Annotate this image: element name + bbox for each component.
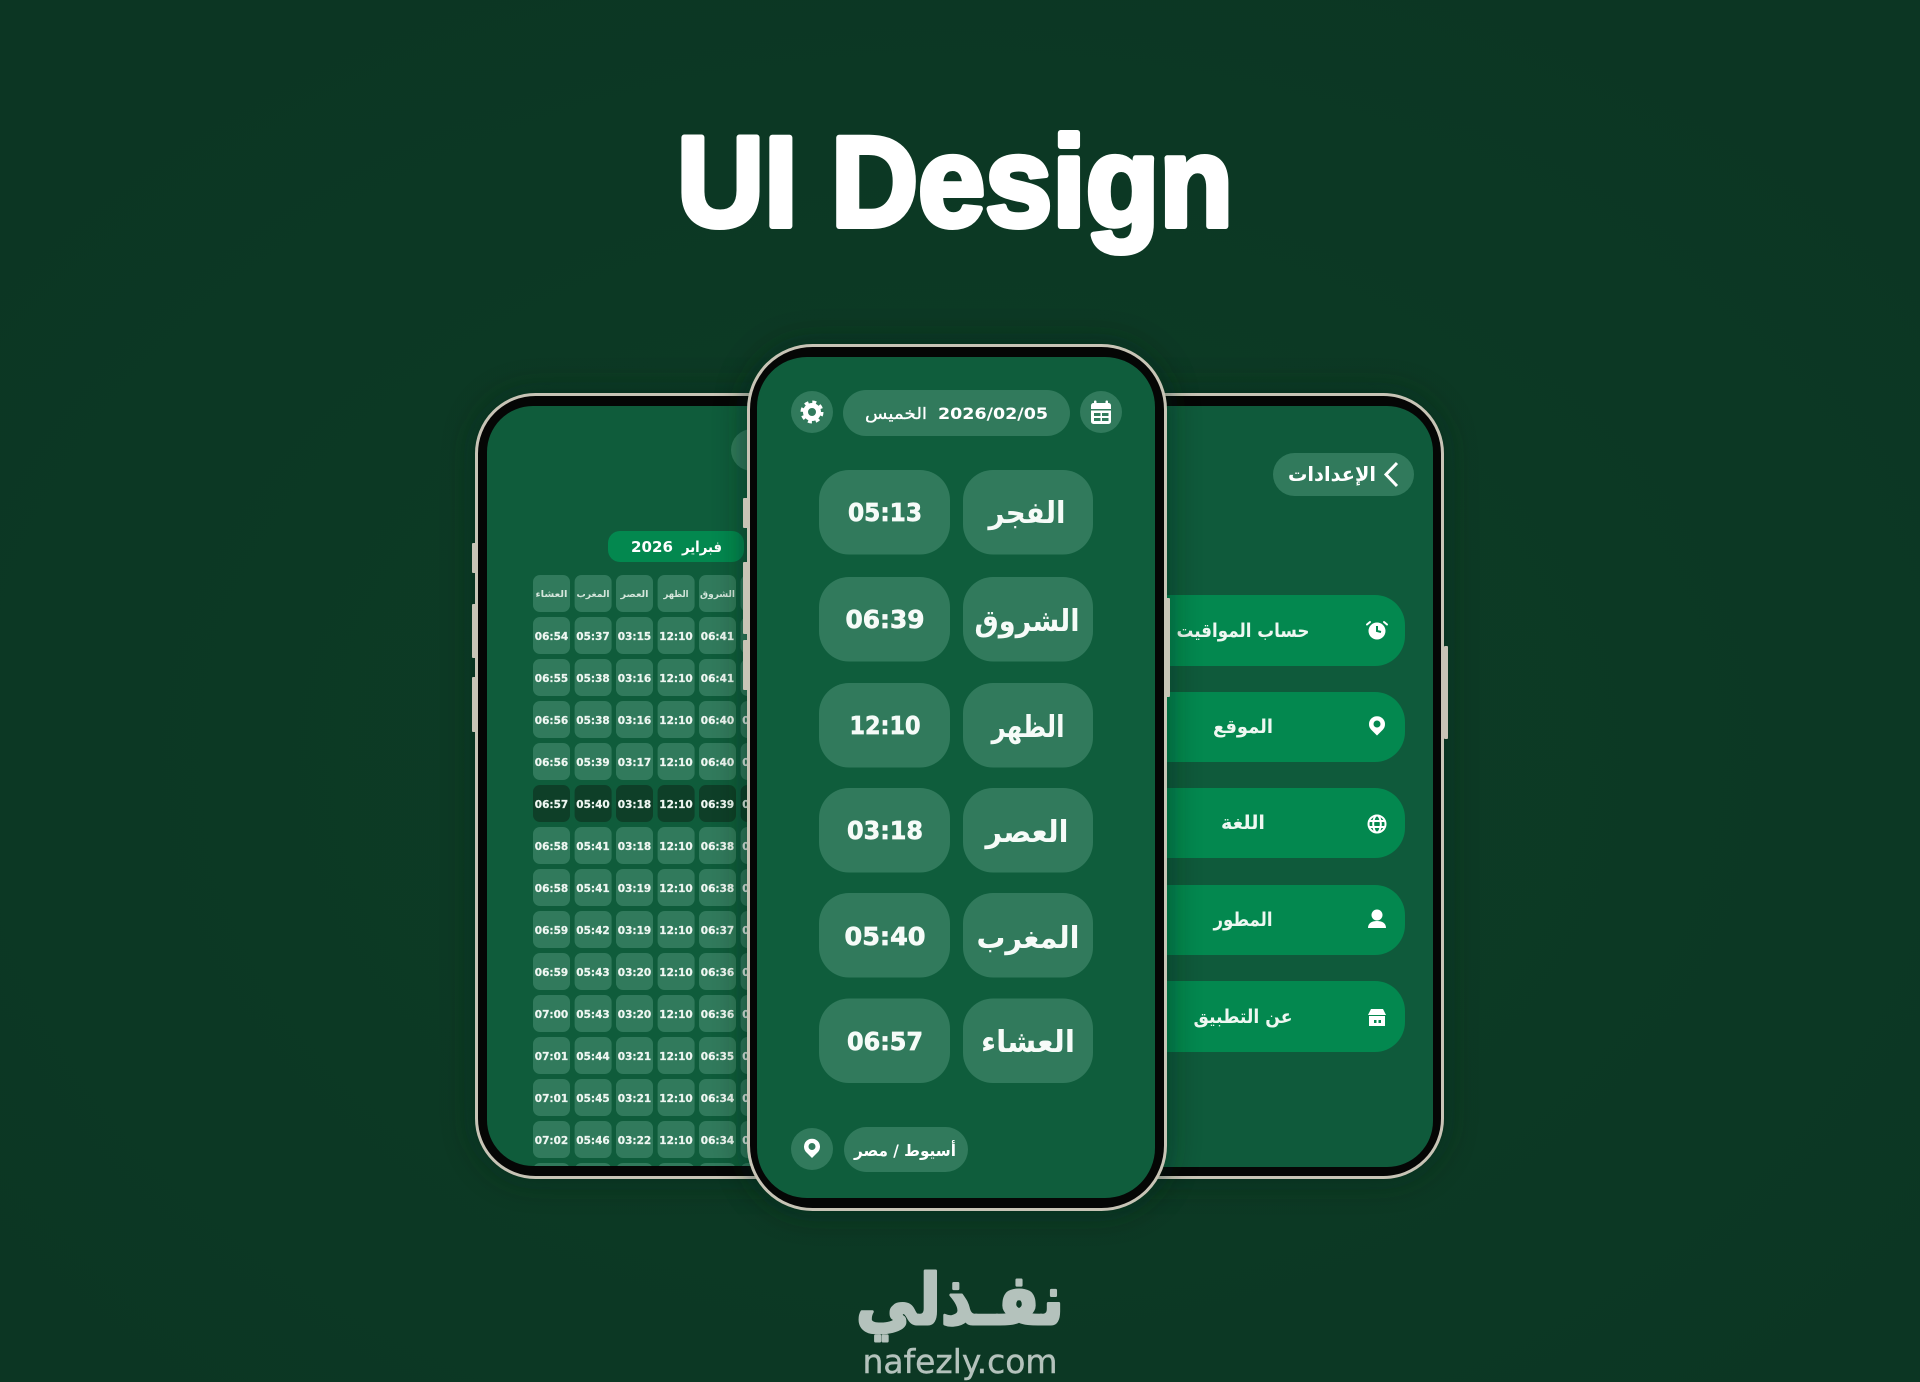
table header row: الشروق [700,590,735,600]
table row 11: 07:01 [535,1051,568,1063]
month pill [608,531,744,562]
prayer row: Asr: العصر [984,815,1068,850]
prayer row: Asr: 03:18 [847,816,923,845]
phone frame [1064,394,1442,1178]
table row 9 [533,953,747,990]
table row 12: 12:10 [659,1093,693,1105]
month pill: فبراير [681,538,722,556]
table row 12: 03:21 [618,1093,651,1105]
table row 11: 12:10 [659,1051,693,1063]
table row 7: 05:41 [576,883,610,895]
table row 13: 03:22 [618,1135,651,1147]
table header row [533,575,743,612]
table header row: العصر [619,590,648,600]
table row 1: 12:10 [659,631,693,643]
table row 10: 03:20 [618,1009,651,1021]
calendar button [1080,391,1122,433]
table row 6: 03:18 [618,841,651,853]
month pill: 2026 [631,538,673,556]
table row 12: 06:34 [701,1093,734,1105]
menu item: about app: عن التطبيق [1194,1006,1292,1028]
table row 4: 05:16 [742,757,776,769]
side button [1444,646,1448,739]
table row 1: 06:54 [535,631,568,643]
table row 3 [533,701,747,738]
table row 1: 06:41 [701,631,734,643]
phone frame [476,394,854,1178]
phone: settings (right) [1060,393,1448,1179]
header circle button [731,430,747,470]
table row 7: 12:10 [659,883,693,895]
settings header pill: الإعدادات [1288,462,1376,486]
table row 6: 05:41 [576,841,610,853]
icon: store [1368,1009,1386,1026]
icon: gear [802,402,822,422]
location pill: أسيوط / مصر [853,1140,956,1160]
table row 3: 05:38 [576,715,610,727]
table row 5 highlighted today: 05:40 [576,799,610,811]
table row 11: 03:21 [618,1051,651,1063]
prayer row: Dhuhr [819,683,1093,768]
logo [856,1259,1064,1381]
table row 9: 05:10 [742,967,776,979]
table row 9: 05:43 [576,967,610,979]
table row 4: 05:39 [576,757,610,769]
menu item: location: الموقع [1213,716,1273,738]
table row 3: 05:17 [742,715,776,727]
table row 2: 05:38 [576,673,610,685]
table row 8: 05:11 [742,925,776,937]
table row 11: 05:09 [742,1051,776,1063]
prayer row: Asr [819,788,1093,872]
prayer row: Maghrib: المغرب [976,921,1080,956]
prayer row: Maghrib: 05:40 [844,922,926,951]
location button [791,1128,833,1170]
menu item: developer [1060,885,1405,955]
side buttons [472,543,476,732]
location pill [844,1127,968,1172]
table row 4: 03:17 [618,757,651,769]
logo: نفـذلي [856,1259,1064,1341]
menu item: prayer calculation: حساب المواقيت [1176,620,1310,642]
table row 10: 12:10 [659,1009,693,1021]
table row 11: 06:35 [701,1051,734,1063]
date pill: الخميس [865,404,927,424]
phone: monthly timetable (left) [472,393,756,1179]
table row 10: 07:00 [535,1009,568,1021]
table row 6: 12:10 [659,841,693,853]
table row 8: 12:10 [659,925,693,937]
table row 5 highlighted today [533,785,747,822]
date pill [843,390,1070,436]
table row 9: 06:59 [535,967,568,979]
table row 6 [533,827,747,864]
table row 3: 06:40 [701,715,734,727]
table row 4 [533,743,747,780]
icon: calendar [1091,400,1111,424]
icon: alarm clock [1367,622,1387,640]
table row 2: 12:10 [659,673,693,685]
prayer row: Isha: 06:57 [847,1027,923,1056]
table row 9: 03:20 [618,967,651,979]
table row 8: 06:37 [701,925,734,937]
table row 8: 03:19 [618,925,651,937]
table row 10: 05:43 [576,1009,610,1021]
table row 10 [533,995,747,1032]
prayer row: Fajr: 05:13 [848,498,922,527]
table row 1 [533,617,747,654]
icon: person [1368,910,1386,928]
table row 13: 06:34 [701,1135,734,1147]
table row 1: 05:37 [576,631,610,643]
table row 13: 12:10 [659,1135,693,1147]
website: nafezly.com [862,1342,1058,1381]
table row 6: 05:13 [742,841,776,853]
prayer row: Fajr [819,470,1093,554]
prayer row: Isha [819,998,1093,1083]
phone: prayer times (center) [743,344,1170,1211]
menu item: prayer calculation [1060,595,1405,666]
table row 12: 07:01 [535,1093,568,1105]
table row 7: 03:19 [618,883,651,895]
table row 13: 05:46 [576,1135,610,1147]
table row 11: 05:44 [576,1051,610,1063]
table row 2: 06:41 [701,673,734,685]
prayer row: Sunrise: الشروق [974,604,1080,639]
table row 6: 06:58 [535,841,568,853]
table row 4: 06:40 [701,757,734,769]
menu item: language [1060,788,1405,858]
screen [487,406,857,1166]
table row 5 highlighted today: 05:13 [742,799,776,811]
table row 8: 05:42 [576,925,610,937]
screen [1060,406,1433,1167]
table row 5 highlighted today: 06:39 [701,799,734,811]
screen content [533,430,750,1166]
prayer row: Maghrib [819,893,1093,978]
menu item: location [1060,692,1405,762]
table row 10: 05:10 [742,1009,776,1021]
table row 7: 06:58 [535,883,568,895]
table row 8 [533,911,747,948]
icon: globe [1368,816,1386,832]
table row 4: 12:10 [659,757,693,769]
title: UI Design [677,111,1233,254]
table row 2: 03:16 [618,673,651,685]
prayer row: Sunrise [819,577,1093,662]
settings button [791,391,833,433]
prayer row: Dhuhr: الظهر [990,710,1064,745]
prayer row: Isha: العشاء [981,1025,1075,1060]
settings header pill [1273,453,1414,496]
table row 7: 06:38 [701,883,734,895]
table row 13 [533,1121,748,1158]
table row 9: 06:36 [701,967,734,979]
prayer row: Sunrise: 06:39 [846,605,924,634]
prayer row: Dhuhr: 12:10 [850,711,920,740]
table header row: الظهر [663,590,688,600]
table row 13: 05:07 [742,1135,776,1147]
table row 3: 12:10 [659,715,693,727]
icon: pin [1369,716,1385,736]
table row 12: 05:08 [742,1093,776,1105]
table row 7: 05:12 [742,883,776,895]
table header row: المغرب [576,590,610,600]
screen [757,357,1155,1198]
table header row: العشاء [536,590,568,600]
icon: pin [804,1139,820,1158]
menu item: developer: المطور [1213,909,1272,931]
table row 3: 03:16 [618,715,651,727]
side buttons [743,498,1170,697]
table row 5 highlighted today: 12:10 [659,799,693,811]
table row 13: 07:02 [535,1135,568,1147]
menu item: language: اللغة [1221,812,1265,834]
table row 1: 03:15 [618,631,651,643]
table row 8: 06:59 [535,925,568,937]
table row 2: 06:55 [535,673,568,685]
table row 3: 06:56 [535,715,568,727]
table row 2 [533,659,747,696]
date pill: 2026/02/05 [938,404,1048,423]
table row 12: 05:45 [576,1093,610,1105]
table row 6: 06:38 [701,841,734,853]
table row 5 highlighted today: 03:18 [618,799,651,811]
table row 4: 06:56 [535,757,568,769]
prayer row: Fajr: الفجر [987,496,1066,531]
table row 14 clipped [534,1163,750,1166]
table row 5 highlighted today: 06:57 [535,799,568,811]
table row 12 [533,1079,747,1116]
table row 7 [533,869,747,906]
table row 11 [533,1037,747,1074]
phone frame [748,346,1166,1210]
table row 10: 06:36 [701,1009,734,1021]
menu item: about app [1060,981,1405,1052]
table row 9: 12:10 [659,967,693,979]
